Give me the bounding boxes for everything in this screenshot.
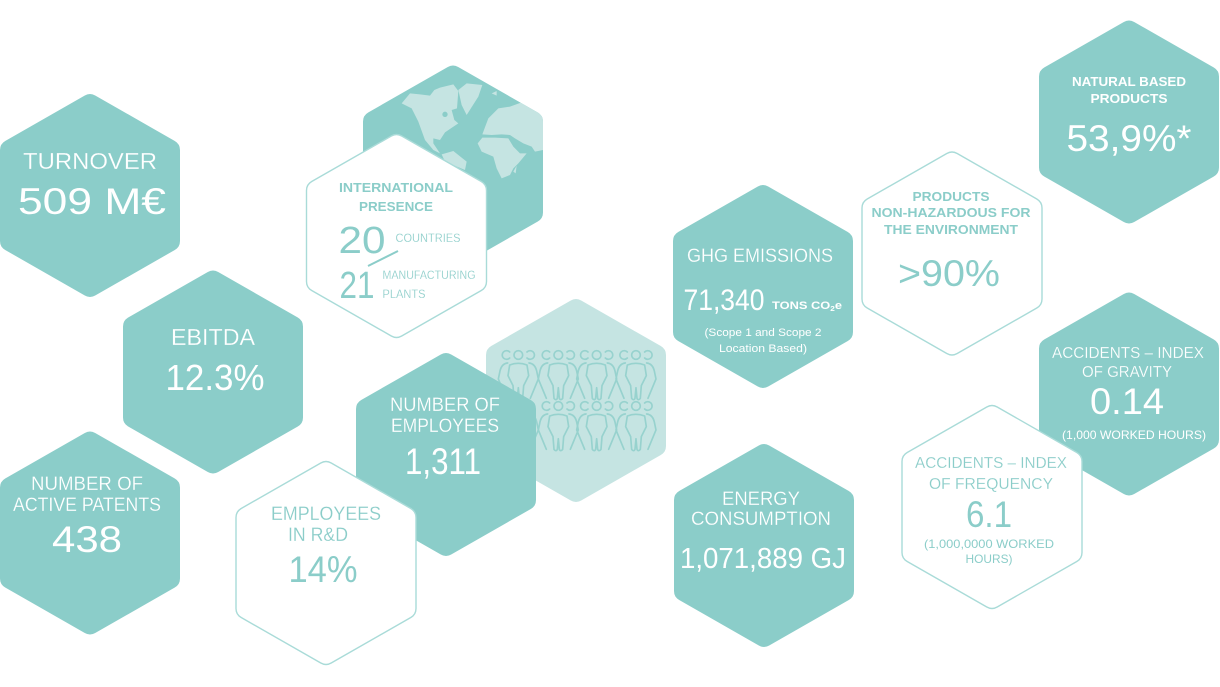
label: international presence: INTERNATIONAL <box>339 180 453 195</box>
value: 21 manufacturing plants: MANUFACTURING <box>382 270 476 282</box>
icon: world map <box>402 83 543 178</box>
label: employees in R&D: EMPLOYEES <box>271 504 381 525</box>
value: products non-hazardous: >90% <box>898 253 1000 294</box>
hexagon: natural based products <box>1039 20 1219 224</box>
note: worked hours: HOURS) <box>966 552 1012 566</box>
value: GHG emissions: e <box>835 300 842 312</box>
label: products non-hazardous: NON-HAZARDOUS FOR <box>872 205 1031 220</box>
label: accidents index of gravity: ACCIDENTS – INDEX <box>1052 345 1205 362</box>
label: accidents index of frequency: ACCIDENTS – INDEX <box>915 455 1068 472</box>
hexagon: people pictogram <box>486 299 666 502</box>
hexagon: EBITDA <box>123 270 303 474</box>
label: energy consumption: CONSUMPTION <box>691 509 831 530</box>
hexagon: turnover <box>0 94 180 297</box>
divider slash <box>368 251 398 266</box>
label: number of employees: EMPLOYEES <box>391 416 499 437</box>
hexagon: international presence <box>306 134 486 338</box>
note: scope: Location Based) <box>719 343 807 355</box>
hexagon: energy consumption <box>674 444 854 647</box>
value: natural based products: 53,9%* <box>1066 118 1192 159</box>
value: 21 manufacturing plants: PLANTS <box>382 289 426 301</box>
label: active patents: NUMBER OF <box>31 474 143 495</box>
label: active patents: ACTIVE PATENTS <box>13 495 161 516</box>
label: natural based products: NATURAL BASED <box>1072 74 1186 89</box>
note: worked hours: (1,000,0000 WORKED <box>924 537 1054 551</box>
hexagon: employees in R&D <box>236 462 416 664</box>
value: 21 manufacturing plants <box>340 265 476 307</box>
value: number of employees: 1,311 <box>405 441 481 482</box>
hexagon: number of employees <box>356 353 536 556</box>
hexagon: world map <box>363 66 543 268</box>
value: active patents: 438 <box>52 519 122 560</box>
hexagon: active patents <box>0 432 180 634</box>
icon: people <box>498 351 656 451</box>
label: turnover: TURNOVER <box>23 148 157 174</box>
value: turnover: 509 M€ <box>18 181 166 222</box>
value: accidents index of frequency: 6.1 <box>966 494 1012 535</box>
label: accidents index of frequency: OF FREQUENCY <box>929 476 1053 493</box>
label: international presence: PRESENCE <box>359 199 433 214</box>
value: energy consumption: 1,071,889 GJ <box>680 543 846 575</box>
label: energy consumption: ENERGY <box>722 489 800 510</box>
note: scope: (Scope 1 and Scope 2 <box>704 327 822 339</box>
label: GHG emissions: GHG EMISSIONS <box>687 246 833 267</box>
label: products non-hazardous: PRODUCTS <box>912 189 990 204</box>
value: accidents index of gravity: 0.14 <box>1090 381 1164 422</box>
label: products non-hazardous: THE ENVIRONMENT <box>884 222 1018 237</box>
value: 20 countries: 20 <box>338 220 386 262</box>
value: 21 manufacturing plants: 21 <box>340 265 374 307</box>
value: GHG emissions: TONS CO <box>772 300 822 312</box>
label: EBITDA: EBITDA <box>171 324 256 350</box>
label: accidents index of gravity: OF GRAVITY <box>1082 364 1172 381</box>
hexagon: products non-hazardous <box>862 152 1042 355</box>
hexagon: GHG emissions <box>673 185 853 388</box>
value: employees in R&D: 14% <box>288 549 358 590</box>
label: employees in R&D: IN R&D <box>288 525 348 546</box>
label: number of employees: NUMBER OF <box>390 395 500 416</box>
value: 20 countries <box>338 220 461 262</box>
hexagon: accidents index of frequency <box>902 406 1082 608</box>
label: natural based products: PRODUCTS <box>1090 91 1168 106</box>
hexagon: accidents index of gravity <box>1039 292 1219 496</box>
value: 20 countries: COUNTRIES <box>396 233 461 245</box>
value: GHG emissions: 2 <box>830 306 835 313</box>
value: GHG emissions <box>684 284 842 317</box>
value: EBITDA: 12.3% <box>166 357 264 398</box>
note: 1,000 worked hours: (1,000 WORKED HOURS) <box>1062 428 1206 442</box>
value: GHG emissions: 71,340 <box>684 284 764 317</box>
